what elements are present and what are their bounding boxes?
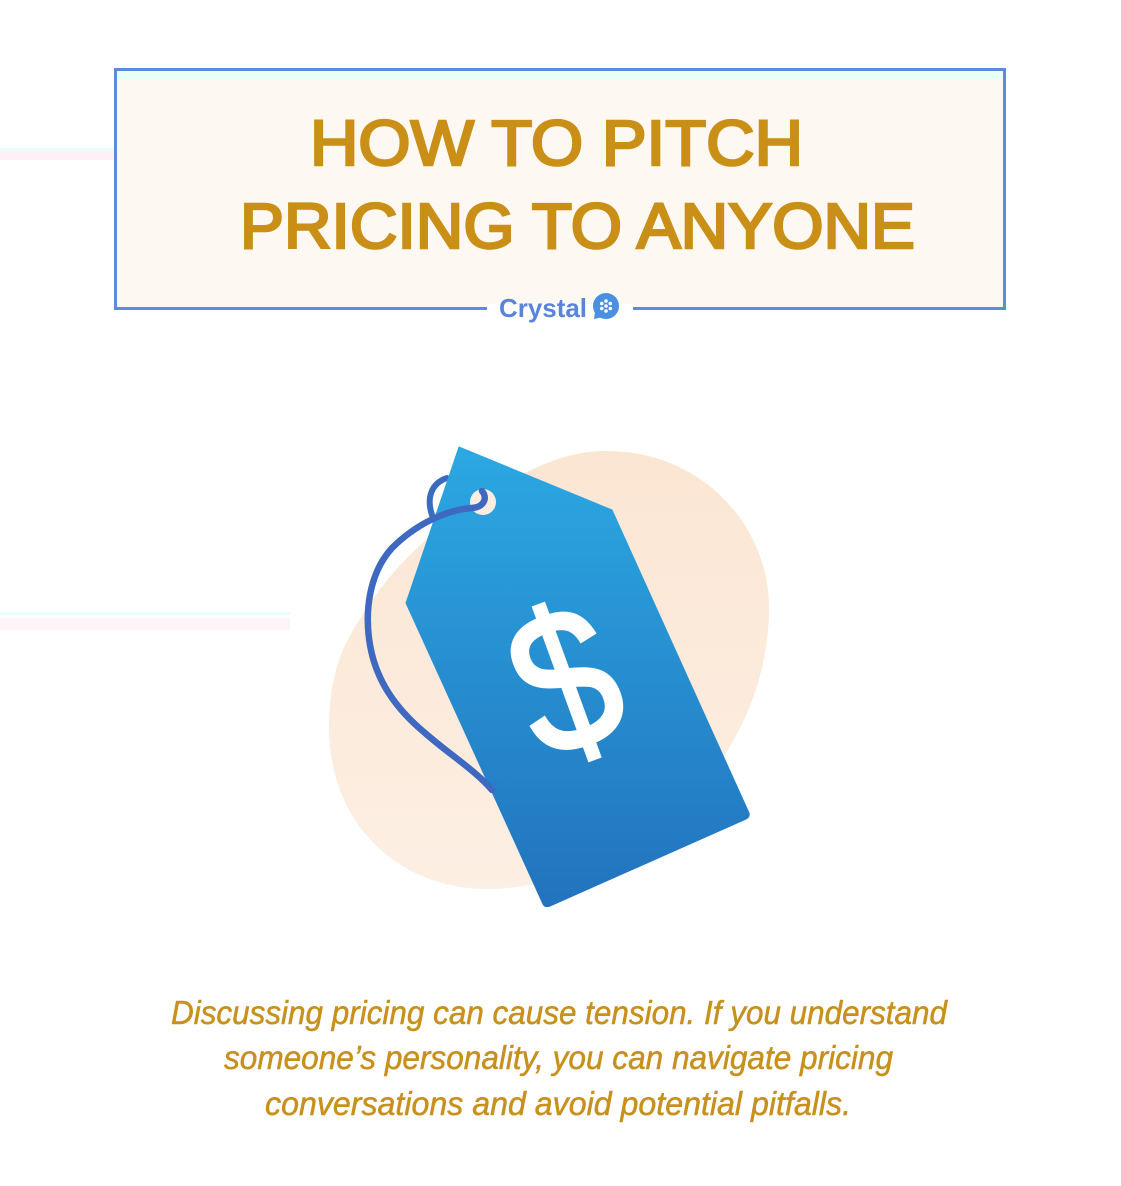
intro paragraph (171, 994, 949, 1122)
price tag body (406, 447, 749, 907)
title text: PRICING TO ANYONE (240, 190, 915, 262)
title panel (116, 70, 1004, 316)
illustration: price tag on blob (329, 447, 769, 907)
tag hole (470, 489, 496, 515)
background blob (329, 451, 769, 889)
title text (240, 107, 915, 262)
intro paragraph: Discussing pricing can cause tension. If you understand (171, 994, 949, 1031)
icon: chat bubble with flower (593, 293, 619, 319)
string loop behind tag (430, 478, 447, 515)
string (368, 491, 492, 790)
brand logo: Crystal: Crystal (499, 293, 587, 323)
title text: HOW TO PITCH (310, 107, 803, 179)
intro paragraph: someone’s personality, you can navigate pricing (224, 1039, 894, 1076)
dollar sign: $ (481, 558, 649, 802)
intro paragraph: conversations and avoid potential pitfalls. (265, 1085, 851, 1122)
